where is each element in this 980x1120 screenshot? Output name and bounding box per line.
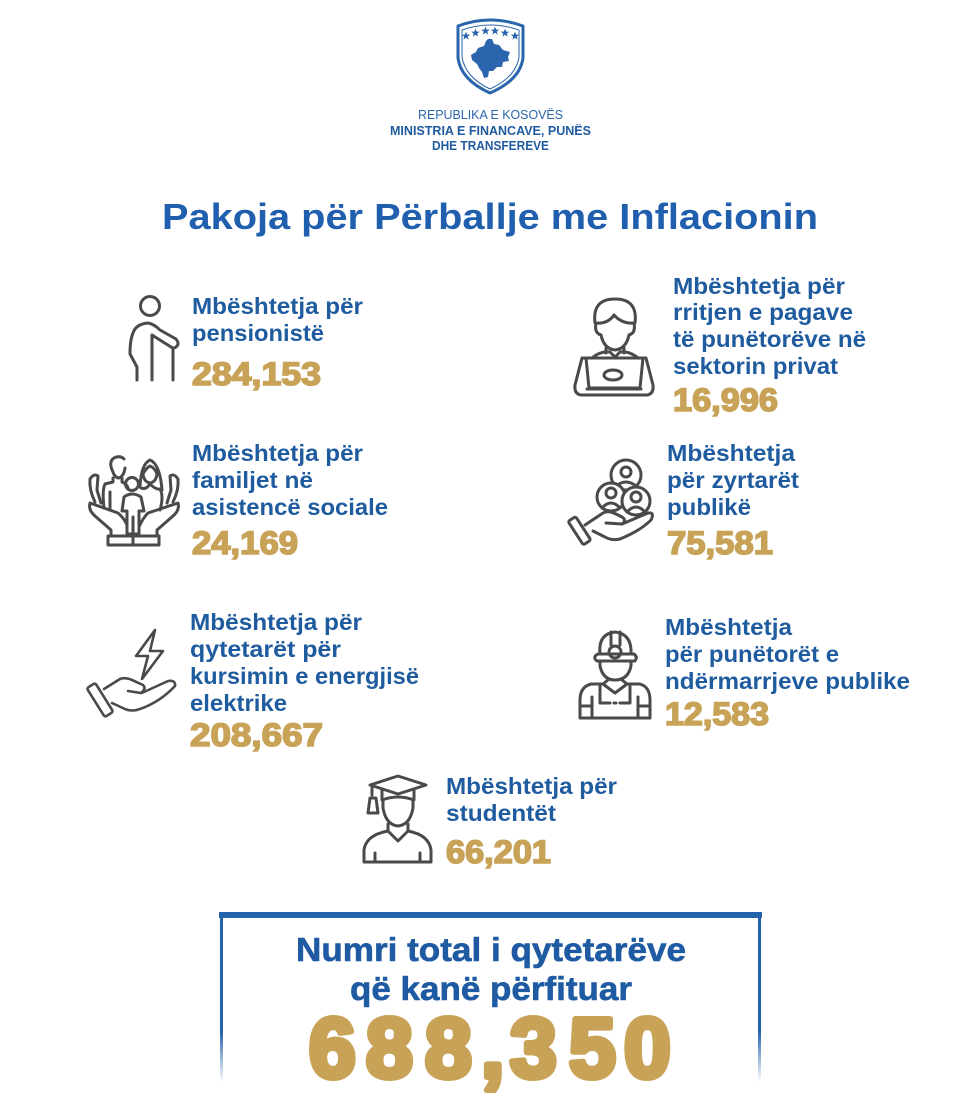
label: familjet në xyxy=(192,467,313,493)
number: 75,581 xyxy=(667,525,773,561)
label xyxy=(673,273,866,379)
number: 24,169 xyxy=(192,525,298,561)
item: pensioners xyxy=(130,293,363,392)
number: 208,667 xyxy=(190,717,323,753)
label: Mbështetja për xyxy=(446,773,617,799)
item: families in social assistance xyxy=(90,440,388,561)
label: për punëtorët e xyxy=(665,641,839,667)
label: asistencë sociale xyxy=(192,494,388,520)
number: 66,201 xyxy=(446,834,551,870)
item: electricity savings xyxy=(87,609,419,753)
ministry name: DHE TRANSFEREVE xyxy=(432,139,549,153)
label: kursimin e energjisë xyxy=(190,663,419,689)
item: private sector workers xyxy=(575,273,866,418)
label: rritjen e pagave xyxy=(673,299,853,325)
total number: 688,350 xyxy=(309,1001,671,1095)
label xyxy=(667,440,799,520)
icon: graduate with cap xyxy=(364,776,431,862)
label: ndërmarrjeve publike xyxy=(665,668,910,694)
item: students xyxy=(364,773,617,870)
label: për zyrtarët xyxy=(667,467,799,493)
total heading: Numri total i qytetarëve xyxy=(296,931,686,968)
logo: Kosovo coat of arms xyxy=(458,20,523,93)
icon: elderly person with cane xyxy=(130,296,178,380)
item: public officials xyxy=(568,440,799,561)
label: Mbështetja xyxy=(665,614,792,640)
number: 12,583 xyxy=(665,696,769,732)
label xyxy=(192,440,388,520)
label: të punëtorëve në xyxy=(673,326,866,352)
label: Mbështetja për xyxy=(673,273,845,299)
label: elektrike xyxy=(190,690,287,716)
number: 16,996 xyxy=(673,382,778,418)
label: publikë xyxy=(667,494,751,520)
icon: miner with helmet xyxy=(580,632,650,718)
icon: hand with lightning bolt xyxy=(87,630,175,717)
label xyxy=(190,609,419,716)
label: qytetarët për xyxy=(190,636,341,662)
label: pensionistë xyxy=(192,320,324,346)
label: Mbështetja xyxy=(667,440,795,466)
box frame xyxy=(219,912,762,1082)
ministry name xyxy=(390,108,591,153)
ministry name: MINISTRIA E FINANCAVE, PUNËS xyxy=(390,123,591,138)
label: studentët xyxy=(446,800,556,826)
icon: hands holding a family xyxy=(90,457,178,545)
icon: person at laptop xyxy=(575,299,653,395)
label: Mbështetja për xyxy=(192,440,363,466)
title: Pakoja për Përballje me Inflacionin xyxy=(162,196,818,237)
panel: total beneficiaries xyxy=(219,912,762,1095)
label: Mbështetja për xyxy=(192,293,363,319)
icon: hand holding people xyxy=(568,460,652,545)
number: 284,153 xyxy=(192,356,321,392)
ministry name: REPUBLIKA E KOSOVËS xyxy=(418,108,563,122)
item: public enterprise workers xyxy=(580,614,910,732)
label xyxy=(192,293,363,346)
label: Mbështetja për xyxy=(190,609,362,635)
total heading xyxy=(296,931,686,1007)
label: sektorin privat xyxy=(673,353,838,379)
label xyxy=(665,614,910,694)
label xyxy=(446,773,617,826)
total heading: që kanë përfituar xyxy=(350,970,632,1007)
